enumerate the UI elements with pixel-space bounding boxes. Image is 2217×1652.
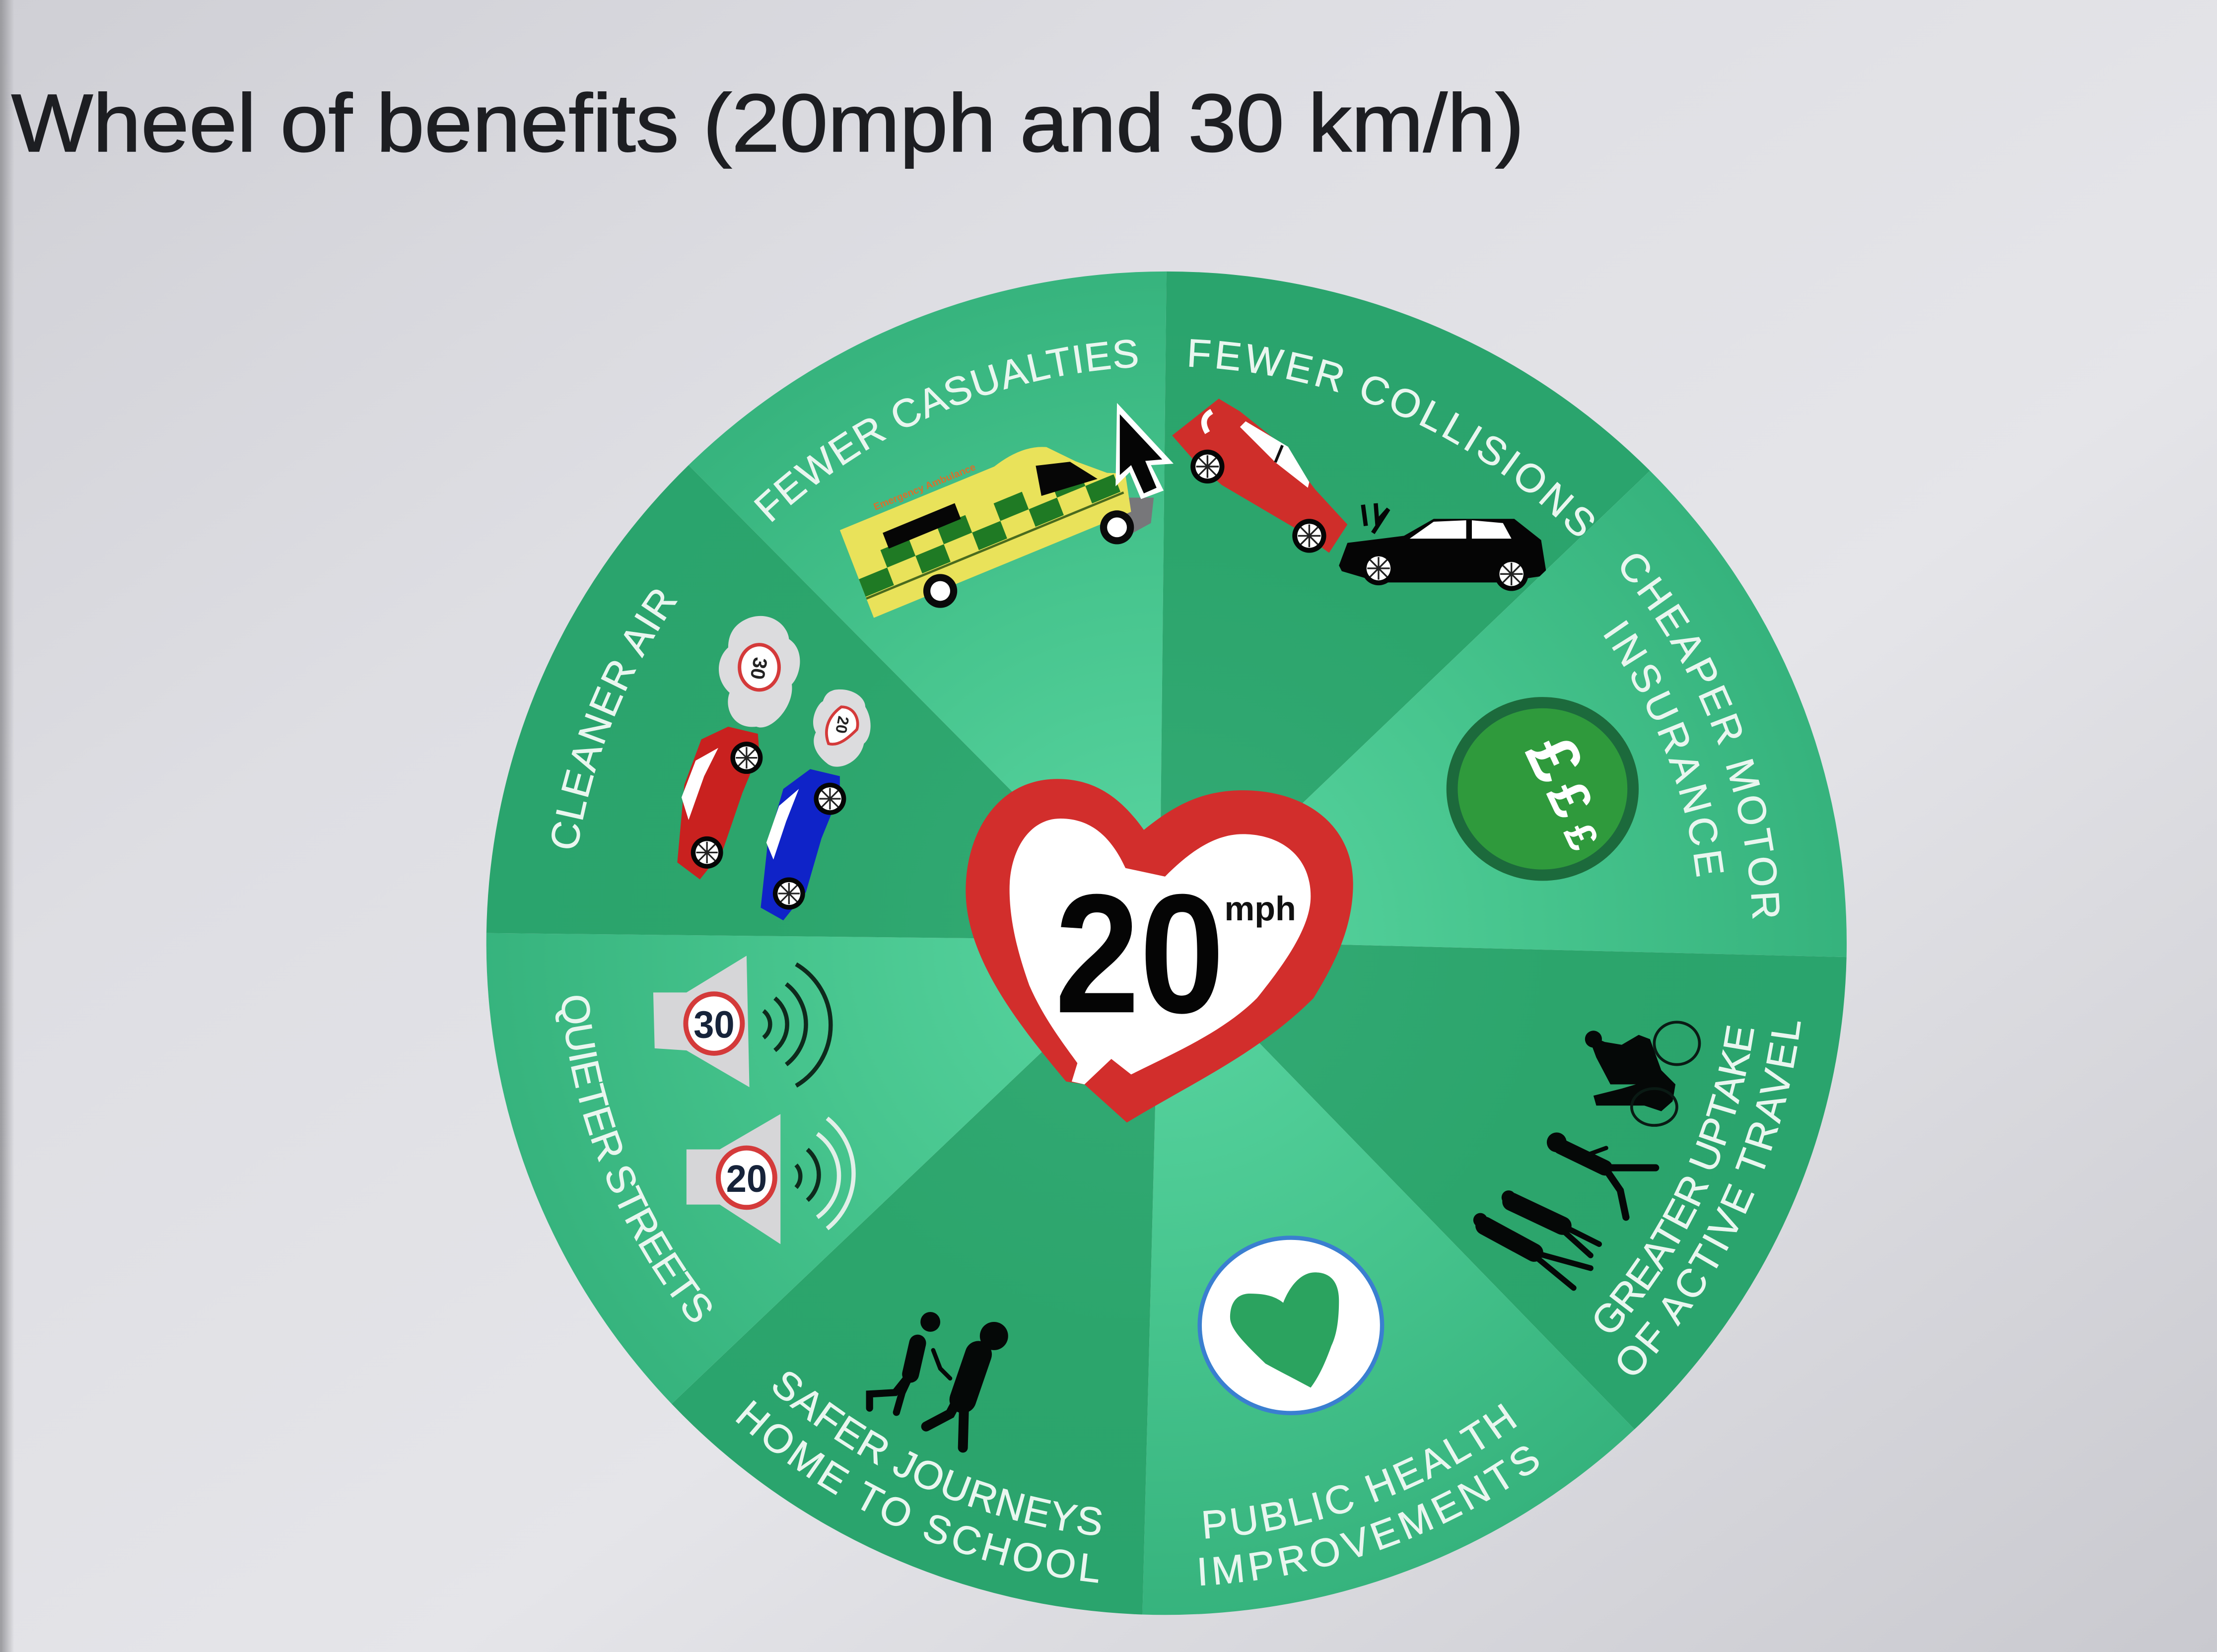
panel: fewer collisions: [1160, 272, 1650, 940]
icon: speaker 20: [687, 1114, 854, 1244]
heart centre: [1010, 819, 1311, 1084]
icon: blue car: [761, 769, 846, 920]
icon: exhaust cloud 30: [719, 616, 800, 728]
icon: red car crashing: [1172, 399, 1347, 553]
panel: fewer casualties: [689, 272, 1167, 940]
icon: speaker 20: 20: [726, 1158, 767, 1200]
label: fewer casualties: FEWER CASUALTIES: [754, 340, 1138, 522]
title: Wheel of benefits (20mph and 30 km/h): [11, 77, 1524, 169]
label: home to school: HOME TO SCHOOL: [736, 1400, 1098, 1583]
icon: speaker 30: [653, 956, 831, 1087]
speed value: 20: [1055, 859, 1225, 1048]
panel: greater uptake of active travel: [1160, 940, 1847, 1429]
icon: runner: [1547, 1132, 1656, 1217]
icon: children walking: [870, 1312, 1008, 1447]
icon: cyclists: [1585, 1022, 1700, 1125]
icon: pound coin: £: [1511, 724, 1598, 793]
label: fewer collisions: FEWER COLLISIONS: [1189, 339, 1594, 536]
panel: quieter streets: [486, 933, 1160, 1404]
icon: exhaust cloud 20: 20: [832, 715, 852, 735]
icon: exhaust cloud 30: 30: [746, 656, 771, 681]
label: cleaner air: CLEANER AIR: [552, 590, 678, 848]
label: quieter streets: QUIETER STREETS: [555, 996, 712, 1322]
label: safer journeys: SAFER JOURNEYS: [773, 1372, 1102, 1535]
icon: black car: [1339, 503, 1547, 591]
icon: ambulance: Emergency Ambulance: [872, 462, 977, 513]
label: improvements: IMPROVEMENTS: [1199, 1446, 1539, 1585]
icon: walkers: [1473, 1190, 1599, 1288]
label: greater uptake: GREATER UPTAKE: [1594, 1026, 1754, 1332]
heart ring: [966, 779, 1353, 1122]
label: public health: PUBLIC HEALTH: [1203, 1403, 1517, 1539]
icon: pound coin: £: [1554, 816, 1607, 857]
speed unit: mph: [1225, 890, 1296, 928]
icon: ambulance: [838, 417, 1154, 618]
panel: cheaper motor insurance: [1160, 471, 1847, 957]
panel: safer journeys home to school: [672, 940, 1160, 1622]
label: cheaper motor: CHEAPER MOTOR: [1621, 554, 1780, 919]
icon: health heart: [1200, 1238, 1382, 1413]
icon: pound coin: [1452, 703, 1633, 875]
benefits wheel: [486, 272, 1847, 1622]
label: insurance: INSURANCE: [1603, 620, 1724, 877]
icon: exhaust cloud 20: [813, 689, 871, 767]
icon: speaker 30: 30: [693, 1004, 735, 1046]
panel: public health improvements: [1142, 940, 1634, 1620]
icon: red car: [677, 727, 762, 880]
panel: cleaner air: [486, 465, 1160, 940]
label: of active travel: OF ACTIVE TRAVEL: [1617, 1022, 1801, 1375]
icon: pound coin: £: [1534, 771, 1605, 827]
icon: mouse cursor: [1115, 403, 1174, 499]
centre heart sign: [966, 779, 1353, 1122]
